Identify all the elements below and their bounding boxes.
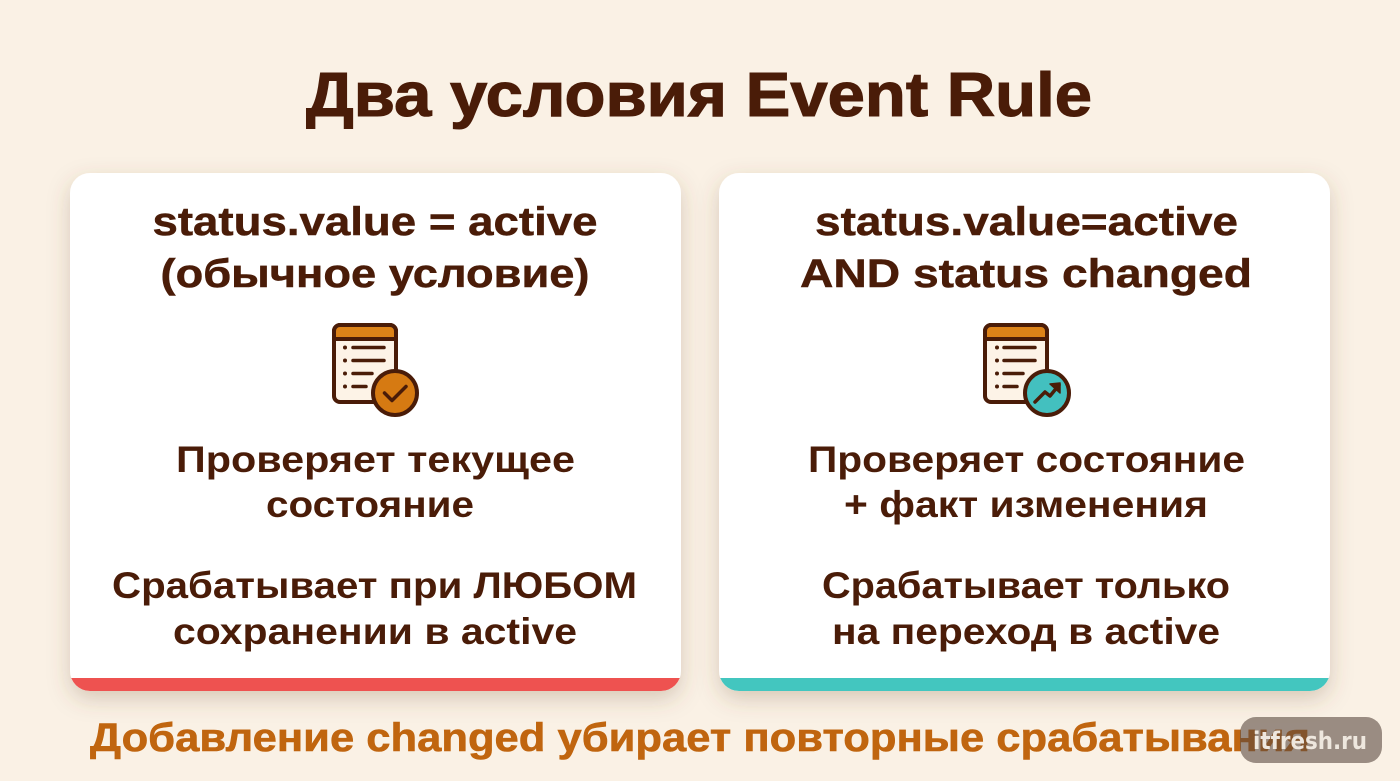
heading: regular condition <box>152 200 598 296</box>
icon: checklist with trend arrow <box>985 325 1069 415</box>
takeaway caption: Добавление changed убирает повторные срабатывания <box>90 716 1310 760</box>
heading: condition with changed: status.value=active <box>815 200 1238 244</box>
icon: checklist with check mark <box>334 325 417 415</box>
panel background <box>70 173 681 691</box>
text: checks state and change: + факт изменения <box>844 484 1208 525</box>
heading: regular condition: status.value = active <box>152 200 598 244</box>
text: checks current state: Проверяет текущее <box>176 439 575 480</box>
text: fires on any save: Срабатывает при ЛЮБОМ <box>112 565 637 606</box>
heading: regular condition: (обычное условие) <box>160 252 590 296</box>
watermark: itfresh.ru <box>1253 727 1367 755</box>
title: Два условия Event Rule <box>306 61 1092 130</box>
heading: condition with changed <box>800 200 1252 296</box>
panel: condition with changed <box>719 173 1330 691</box>
text: checks current state <box>176 439 575 525</box>
text: fires only on transition <box>822 565 1230 652</box>
text: fires on any save <box>112 565 637 652</box>
text: fires only on transition: на переход в active <box>832 611 1220 652</box>
text: checks current state: состояние <box>266 484 474 525</box>
watermark <box>1240 717 1382 763</box>
text: checks state and change <box>808 439 1245 525</box>
text: checks state and change: Проверяет состояние <box>808 439 1245 480</box>
panel: regular condition <box>70 173 681 691</box>
panel background <box>719 173 1330 691</box>
text: fires on any save: сохранении в active <box>173 611 577 652</box>
text: fires only on transition: Срабатывает только <box>822 565 1230 606</box>
heading: condition with changed: AND status changed <box>800 252 1252 296</box>
